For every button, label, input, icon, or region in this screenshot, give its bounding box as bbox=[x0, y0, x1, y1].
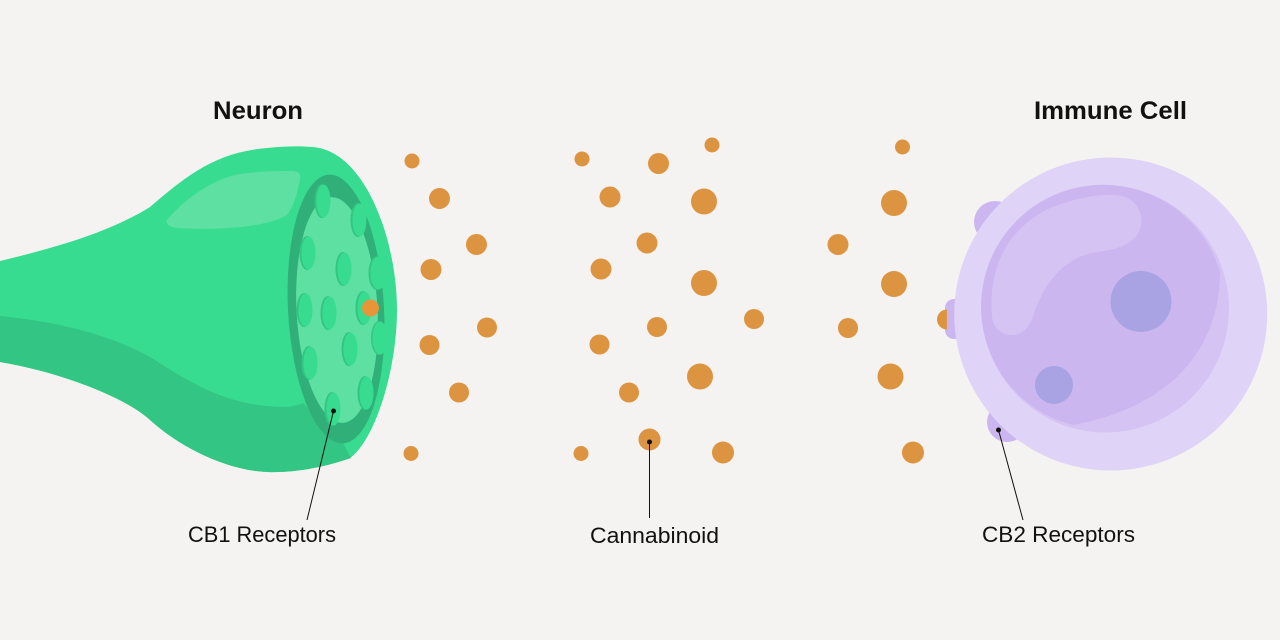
neuron highlight bbox=[167, 171, 300, 229]
cell nucleus bbox=[981, 185, 1220, 425]
cannabinoid at CB2 receptor bbox=[937, 310, 947, 330]
callout: CB2 Receptors bbox=[982, 428, 1135, 547]
callout: Cannabinoid: Cannabinoid bbox=[590, 523, 719, 548]
CB2 receptor bumps bbox=[945, 201, 1027, 442]
nucleus highlight bbox=[991, 195, 1141, 335]
callout: CB2 Receptors: CB2 Receptors bbox=[982, 522, 1135, 547]
callout: CB1 Receptors bbox=[188, 408, 336, 547]
large organelle bbox=[1110, 271, 1172, 332]
illustration: immune cell bbox=[937, 158, 1267, 470]
outer cell bbox=[954, 158, 1267, 470]
heading: Immune Cell: Immune Cell bbox=[1034, 97, 1187, 125]
illustration: neuron terminal bbox=[0, 146, 397, 472]
cannabinoid particles bbox=[404, 138, 924, 464]
neuron face inner bbox=[291, 195, 383, 425]
callout: CB1 Receptors: CB1 Receptors bbox=[188, 522, 336, 547]
CB1 receptors bbox=[296, 184, 388, 426]
small organelle bbox=[1035, 366, 1073, 404]
callout: Cannabinoid bbox=[590, 440, 719, 548]
heading: Neuron: Neuron bbox=[213, 97, 303, 125]
neuron face ring bbox=[281, 172, 391, 446]
cell inner shade bbox=[982, 186, 1229, 432]
neuron lower shadow bbox=[0, 316, 351, 472]
neuron body bbox=[0, 146, 397, 472]
cannabinoid bound to CB1 receptor bbox=[362, 300, 379, 316]
